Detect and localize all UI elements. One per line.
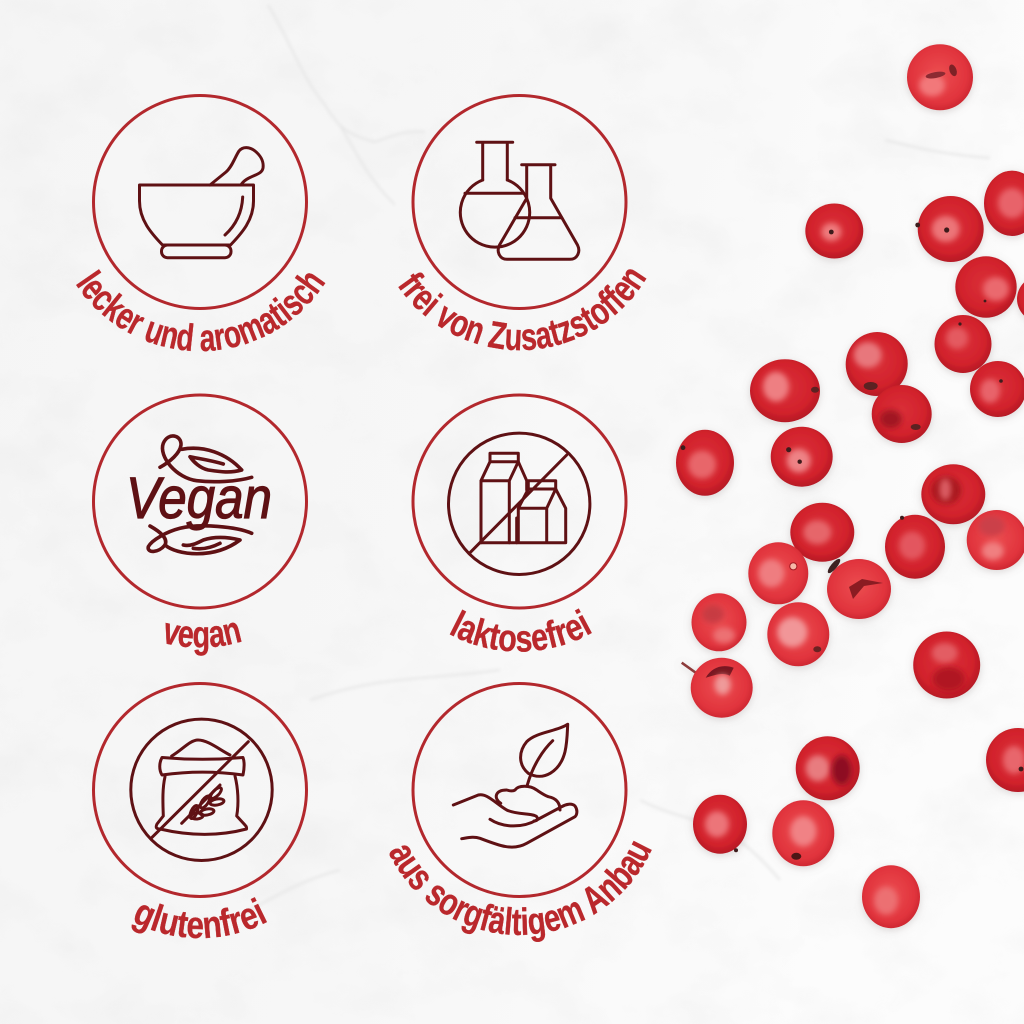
berry <box>872 385 932 443</box>
icon: crossed-out milk cartons <box>448 433 590 574</box>
berry <box>841 327 913 401</box>
berry <box>984 171 1024 236</box>
badge ring <box>413 395 626 608</box>
badge ring <box>413 684 626 896</box>
berry <box>970 361 1024 417</box>
berry <box>693 795 747 854</box>
berry <box>862 865 920 928</box>
berry <box>913 632 980 698</box>
berry <box>826 557 891 619</box>
berry <box>955 256 1017 318</box>
berry <box>790 503 854 562</box>
icon: vegan script logo <box>126 436 272 554</box>
panel: lecker und aromatisch <box>76 94 326 352</box>
icon: mortar and pestle <box>140 148 263 258</box>
badge ring <box>94 395 306 608</box>
berry <box>748 542 808 604</box>
berry <box>750 359 820 422</box>
berry <box>805 204 863 258</box>
panel: glutenfrei <box>92 682 308 938</box>
berry <box>771 427 833 487</box>
berry <box>915 196 984 262</box>
icon: crossed-out flour sack <box>131 719 272 860</box>
icon: vegan script logo: Vegan <box>126 466 272 531</box>
berry <box>934 315 992 373</box>
icon: hand holding seedling <box>453 724 577 847</box>
berry <box>986 728 1024 792</box>
berry <box>907 44 973 110</box>
label: aus sorgfältigem Anbau <box>390 840 652 942</box>
berry <box>676 430 734 496</box>
berry <box>772 800 834 866</box>
berry <box>885 515 945 579</box>
label: frei von Zusatzstoffen <box>398 269 646 350</box>
label: vegan <box>166 622 242 656</box>
berries scattered on the right <box>676 44 1024 928</box>
label: lecker und aromatisch <box>76 269 326 352</box>
label: glutenfrei <box>132 897 267 938</box>
badge ring <box>413 96 626 308</box>
berry <box>921 464 985 524</box>
berry <box>692 593 746 651</box>
berry <box>767 602 829 666</box>
berry <box>1017 276 1024 322</box>
badge ring <box>94 684 306 896</box>
panel: laktosefrei <box>412 394 628 652</box>
berry <box>791 731 865 805</box>
badge ring <box>94 96 306 308</box>
berry <box>967 510 1024 570</box>
panel: aus sorgfältigem Anbau <box>390 682 652 942</box>
panel: frei von Zusatzstoffen <box>398 94 646 350</box>
berry with stem <box>682 658 753 718</box>
label: laktosefrei <box>450 608 592 652</box>
icon: lab flasks <box>460 142 579 259</box>
panel: vegan <box>92 394 308 656</box>
